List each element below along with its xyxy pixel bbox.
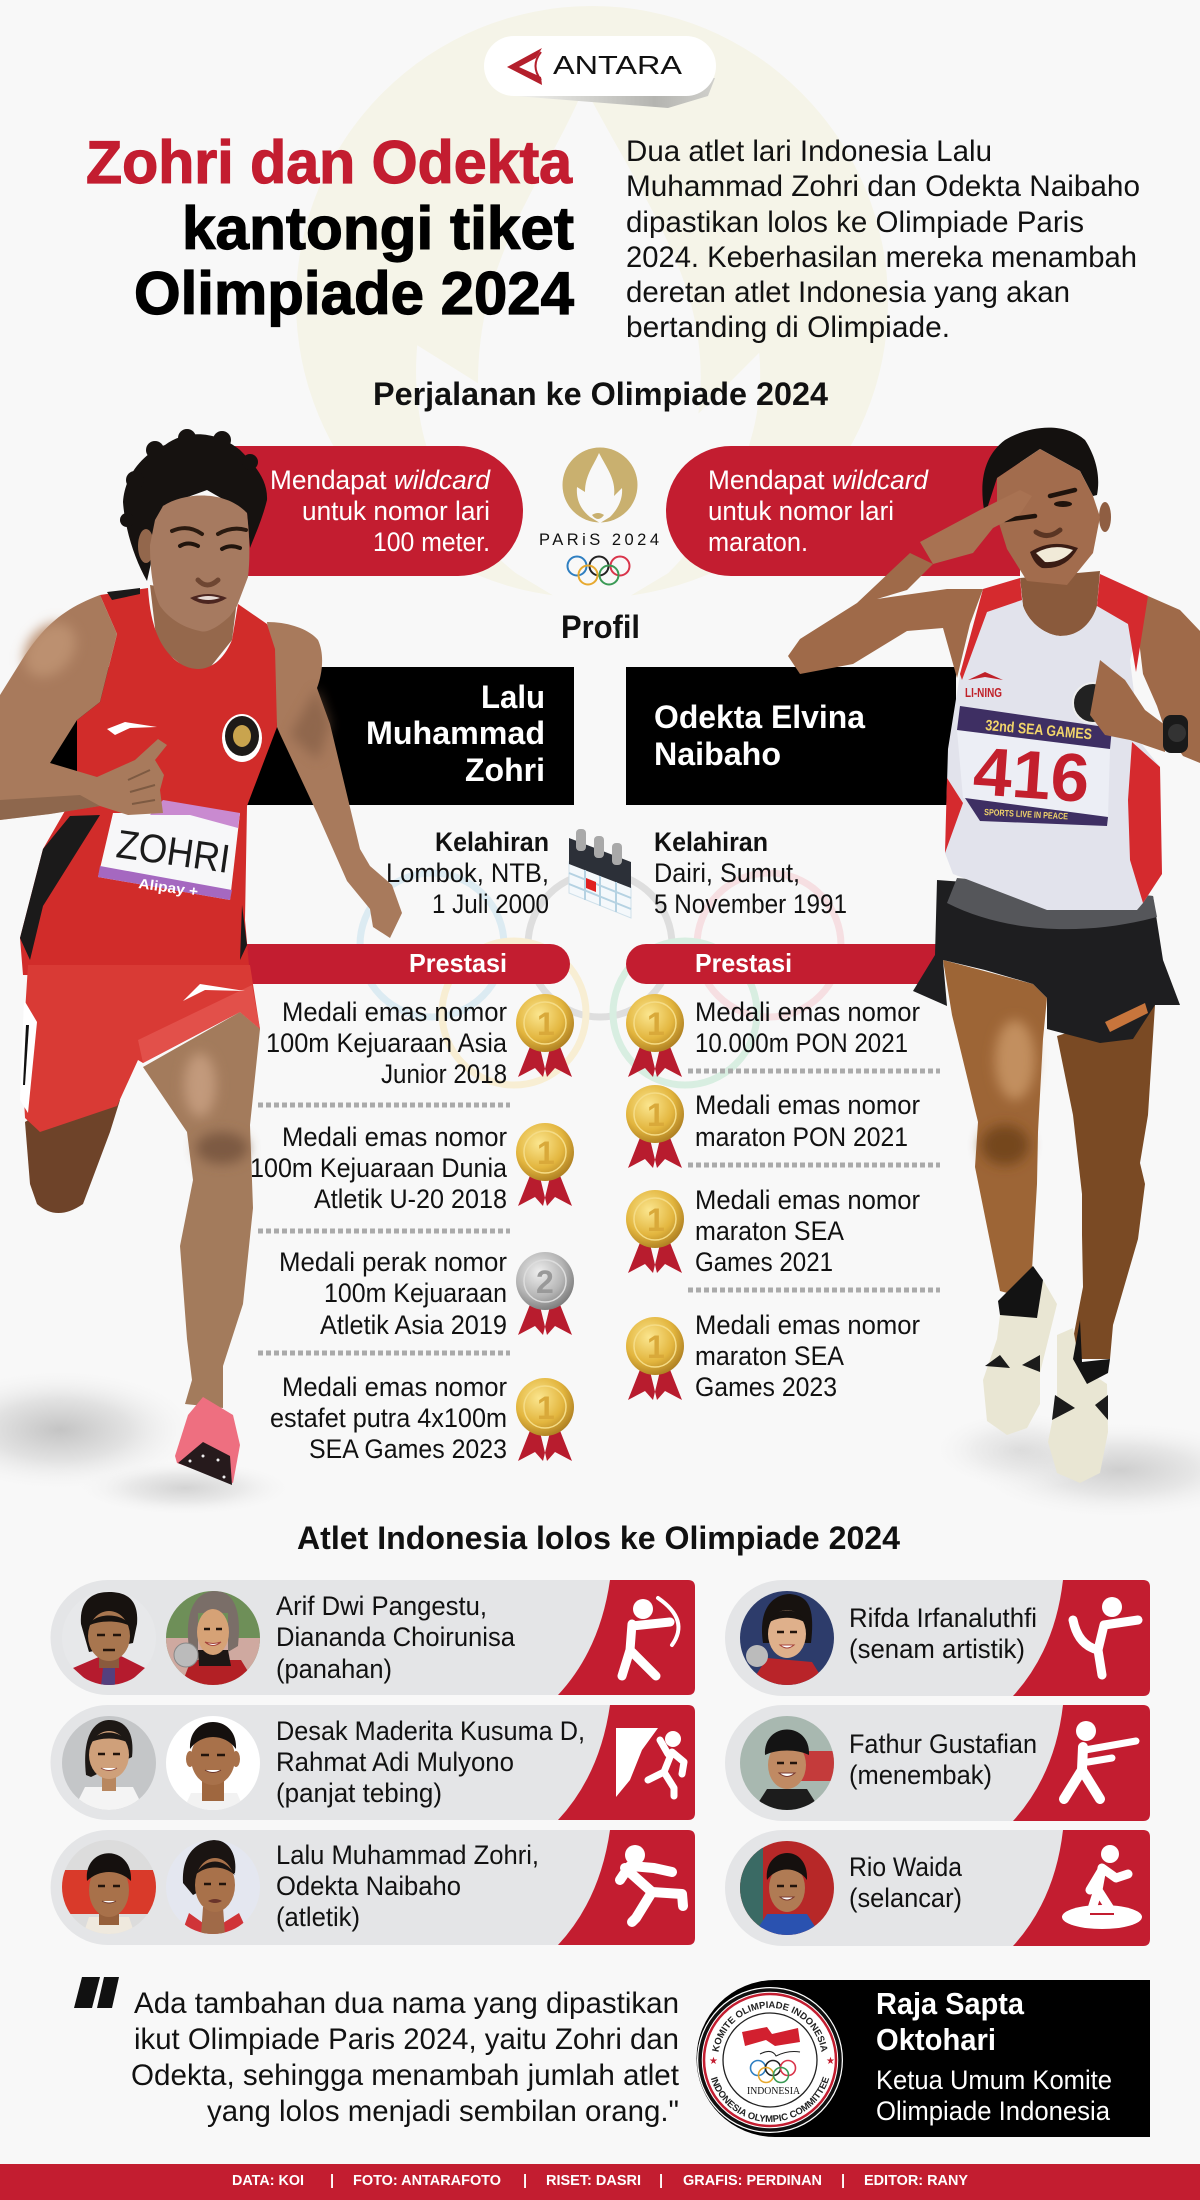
names: senam artistik (849, 1603, 1037, 1664)
panel: left wildcard pill: Mendapat wildcard (270, 465, 491, 495)
panel: left wildcard pill: untuk nomor lari (302, 496, 490, 526)
text: Zohri birth (386, 827, 549, 919)
heading: qualified athletes: Atlet Indonesia lolos ke Olimpiade 2024 (297, 1520, 900, 1556)
quote text: Ada tambahan dua nama yang dipastikan (134, 1987, 679, 2020)
achievement: SEA Games 2023 relay (270, 1372, 507, 1464)
saluting arm (788, 553, 983, 678)
names: senam artistik: (senam artistik) (849, 1634, 1025, 1664)
panel: Zohri name box (50, 667, 574, 805)
speaker role (876, 2065, 1112, 2126)
icon: gold medal 1 left (516, 994, 574, 1077)
photo: Rio (739, 1840, 835, 1936)
title: kantongi tiket (182, 195, 574, 262)
logo: Indonesian Olympic Committee (697, 1987, 843, 2133)
side panels (20, 588, 247, 960)
waistband (947, 878, 1157, 929)
logo: Indonesian Olympic Committee: KOMITE OLIMPIADE INDONESIA (712, 2001, 828, 2052)
names: panjat tebing: Rahmat Adi Mulyono (276, 1747, 514, 1777)
achievement: Asia 2019: 100m Kejuaraan (324, 1278, 507, 1308)
emblem (222, 714, 262, 762)
names: panjat tebing: Desak Maderita Kusuma D, (276, 1716, 585, 1746)
icon: gold medal 3 right (626, 1190, 684, 1273)
icon: gold medal 2 left (516, 1123, 574, 1206)
panel: right wildcard pill: Mendapat wildcard (708, 465, 929, 495)
figure: Zohri running (0, 429, 402, 1485)
panel: selancar (725, 1830, 1150, 1946)
logo: Indonesian Olympic Committee: INDONESIA OLYMPIC COMMITTEE (711, 2076, 830, 2122)
bib: 416 (971, 733, 1092, 817)
quote text (131, 1987, 679, 2128)
panel: panjat tebing (50, 1705, 695, 1820)
heading bar: Prestasi left (240, 944, 570, 984)
text: Odekta birth: Kelahiran (654, 827, 768, 857)
shorts (22, 965, 260, 1132)
achievement: PON 10000m (695, 997, 920, 1058)
bib: Alipay + (138, 875, 199, 899)
panel: atletik (51, 1830, 695, 1945)
achievement: Asia Junior 2018: 100m Kejuaraan Asia (266, 1028, 508, 1058)
achievement: Asia 2019 (279, 1247, 507, 1340)
icon: shooting (1064, 1721, 1136, 1799)
icon: gold medal 2 right: 1 (647, 1097, 665, 1133)
logo: Indonesian Olympic Committee: ★ (826, 2056, 835, 2067)
intro text (626, 135, 1140, 344)
background: faint flame watermark (296, 6, 888, 619)
quote text: yang lolos menjadi sembilan orang." (207, 2095, 679, 2128)
bib (957, 706, 1112, 826)
intro text: Muhammad Zohri dan Odekta Naibaho (626, 170, 1140, 203)
photo: Fathur (739, 1715, 835, 1811)
heading bar: Prestasi right: Prestasi (695, 948, 792, 978)
text: Zohri birth: 1 Juli 2000 (432, 889, 549, 919)
shoes (983, 1266, 1110, 1483)
text: Zohri birth: Kelahiran (435, 827, 549, 857)
achievement: SEA Games 2021: Games 2021 (695, 1247, 833, 1277)
text: Odekta birth (654, 827, 847, 919)
achievement: SEA Games 2021: Medali emas nomor (695, 1185, 920, 1215)
saluting hand (920, 490, 1032, 564)
logo: Indonesian Olympic Committee: ★ (709, 2056, 718, 2067)
panel: Odekta name box: Odekta Elvina (654, 699, 865, 735)
panel: Odekta achievements (626, 944, 940, 1402)
red corner (1013, 1580, 1150, 1696)
logo: Paris 2024: PARiS 2024 (539, 531, 659, 549)
red corner (558, 1580, 695, 1695)
names: menembak: Fathur Gustafian (849, 1729, 1037, 1759)
icon: gymnastics (1073, 1597, 1138, 1675)
icon: gold medal 1 right: 1 (647, 1006, 665, 1042)
right arm (267, 622, 402, 938)
icon: calendar (569, 829, 631, 918)
panel: Odekta name box (626, 667, 956, 805)
achievement: SEA Games 2023 (695, 1310, 920, 1402)
quote text: Odekta, sehingga menambah jumlah atlet (131, 2059, 679, 2092)
achievement: PON marathon (695, 1090, 920, 1152)
shorts (913, 880, 1180, 1043)
intro text: deretan atlet Indonesia yang akan (626, 276, 1070, 309)
names: panahan: (panahan) (276, 1654, 392, 1684)
photo: Rifda (739, 1590, 835, 1686)
shorts tag (1105, 1003, 1148, 1032)
left leg (943, 960, 1047, 1301)
title (86, 129, 575, 327)
pink shoe (175, 1397, 240, 1485)
neck (1020, 571, 1100, 636)
red corner (1013, 1830, 1150, 1946)
names: panahan: Diananda Choirunisa (276, 1622, 516, 1652)
names: atletik: Lalu Muhammad Zohri, (276, 1840, 539, 1870)
icon: running (620, 1845, 683, 1922)
text: Zohri birth: Lombok, NTB, (386, 858, 549, 888)
achievement: World U-20 2018: 100m Kejuaraan Dunia (250, 1153, 508, 1183)
achievement: SEA Games 2023 relay: Medali emas nomor (282, 1372, 507, 1402)
back leg (25, 1100, 120, 1213)
names: menembak: (menembak) (849, 1760, 992, 1790)
icon: surfing (1062, 1845, 1142, 1929)
text: Odekta birth: 5 November 1991 (654, 889, 847, 919)
photo: Desak (61, 1715, 157, 1811)
names: panahan (276, 1591, 516, 1684)
names: atletik: (atletik) (276, 1902, 360, 1932)
icon: climbing (616, 1728, 684, 1797)
bib: ZOHRI (114, 822, 233, 882)
neck (150, 585, 237, 680)
panel: right wildcard pill (666, 446, 1020, 576)
achievement: SEA Games 2021 (695, 1185, 920, 1277)
footer: credits (0, 2164, 1200, 2200)
ground shadow left (0, 1368, 295, 1516)
head (120, 429, 267, 632)
head (982, 428, 1111, 585)
footer: credits: | (330, 2173, 334, 2189)
logo on singlet: LI-NING (965, 685, 1002, 700)
panel: left wildcard pill: 100 meter. (373, 527, 490, 557)
achievement: PON 10000m: 10.000m PON 2021 (695, 1028, 908, 1058)
icon: gold medal 3 right: 1 (647, 1202, 665, 1238)
footer: credits: | (523, 2173, 527, 2189)
intro text: dipastikan lolos ke Olimpiade Paris (626, 206, 1084, 239)
intro text: 2024. Keberhasilan mereka menambah (626, 241, 1137, 274)
speaker role: Ketua Umum Komite (876, 2065, 1112, 2095)
footer: credits: FOTO: ANTARAFOTO (353, 2173, 501, 2189)
bib: 32nd SEA GAMES (985, 717, 1093, 743)
title: Zohri dan Odekta (86, 129, 573, 196)
footer: credits: RISET: DASRI (546, 2173, 641, 2189)
footer: credits: | (841, 2173, 845, 2189)
icon: archery (622, 1598, 678, 1676)
panel: Odekta name box: Naibaho (654, 736, 781, 772)
panel: Zohri achievements (240, 944, 570, 1464)
achievement: SEA Games 2023: Games 2023 (695, 1372, 837, 1402)
heading: journey: Perjalanan ke Olimpiade 2024 (373, 376, 828, 412)
achievement: PON 10000m: Medali emas nomor (695, 997, 920, 1027)
icon: gold medal 1 left: 1 (537, 1006, 555, 1042)
red corner (558, 1830, 695, 1945)
text: Odekta birth: Dairi, Sumut, (654, 858, 800, 888)
achievement: Asia 2019: Medali perak nomor (279, 1247, 507, 1277)
heading bar: Prestasi right (626, 944, 936, 984)
names: atletik (276, 1840, 539, 1932)
names: selancar: Rio Waida (849, 1852, 963, 1882)
footer: credits: GRAFIS: PERDINAN (683, 2173, 822, 2189)
front leg (143, 1012, 260, 1408)
footer: credits: DATA: KOI (232, 2173, 304, 2189)
icon: gold medal 1 right (626, 994, 684, 1077)
panel: right wildcard pill: untuk nomor lari (708, 496, 894, 526)
achievement: SEA Games 2023 relay: SEA Games 2023 (309, 1434, 507, 1464)
achievement: SEA Games 2023: maraton SEA (695, 1341, 844, 1371)
panel: right wildcard pill: maraton. (708, 527, 808, 557)
icon: gold medal 4 left: 1 (537, 1390, 555, 1426)
speaker name (876, 1986, 1025, 2057)
title: Olimpiade 2024 (134, 260, 575, 327)
achievement: SEA Games 2023 relay: estafet putra 4x100m (270, 1403, 507, 1433)
intro text: bertanding di Olimpiade. (626, 311, 950, 344)
speaker name: Raja Sapta (876, 1986, 1025, 2021)
panel: speaker (696, 1980, 1150, 2137)
background: faint olympic rings (360, 873, 841, 1085)
panel: left wildcard pill (230, 446, 523, 576)
achievement: SEA Games 2023: Medali emas nomor (695, 1310, 920, 1340)
left hand detail (128, 770, 155, 804)
bib: SPORTS LIVE IN PEACE (984, 807, 1068, 821)
achievement: PON marathon: Medali emas nomor (695, 1090, 920, 1120)
right hand (1090, 660, 1165, 752)
names: menembak (849, 1729, 1037, 1790)
names: panjat tebing: (panjat tebing) (276, 1778, 442, 1808)
quote text: ikut Olimpiade Paris 2024, yaitu Zohri dan (134, 2023, 679, 2056)
names: panjat tebing (276, 1716, 585, 1808)
photo: Diananda (165, 1590, 261, 1686)
speaker role: Olimpiade Indonesia (876, 2096, 1111, 2126)
icon: gold medal 4 right (626, 1317, 684, 1400)
logo: Paris 2024 (539, 448, 659, 584)
right arm (1137, 596, 1200, 763)
panel: Zohri name box: Lalu (481, 679, 545, 715)
icon: gold medal 4 left (516, 1378, 574, 1461)
names: panahan: Arif Dwi Pangestu, (276, 1591, 487, 1621)
achievement: Asia Junior 2018: Junior 2018 (381, 1059, 507, 1089)
right leg (1057, 1005, 1155, 1359)
ground shadow right (930, 1410, 1200, 1520)
icon: gold medal 2 left: 1 (537, 1135, 555, 1171)
figure: Odekta running (788, 428, 1200, 1483)
singlet (945, 574, 1162, 910)
footer: credits: | (659, 2173, 663, 2189)
panel: senam artistik (725, 1580, 1150, 1696)
names: selancar: (selancar) (849, 1883, 962, 1913)
panel: panahan (50, 1580, 695, 1695)
intro text: Dua atlet lari Indonesia Lalu (626, 135, 992, 168)
logo: Antara pill: ANTARA (553, 50, 683, 80)
heading bar: Prestasi left: Prestasi (409, 948, 507, 978)
speaker name: Oktohari (876, 2022, 996, 2057)
icon: gold medal 2 right (626, 1085, 684, 1168)
heading: profile: Profil (561, 609, 640, 645)
photo: Rahmat (165, 1715, 261, 1811)
singlet (20, 588, 277, 977)
icon: quotation mark (74, 1977, 119, 2008)
photo: Zohri (61, 1839, 157, 1935)
achievement: World U-20 2018: Atletik U-20 2018 (314, 1184, 507, 1214)
achievement: World U-20 2018 (250, 1122, 508, 1214)
logo: Antara pill (484, 36, 716, 108)
names: senam artistik: Rifda Irfanaluthfi (849, 1603, 1037, 1633)
names: selancar (849, 1852, 963, 1913)
achievement: Asia Junior 2018 (266, 997, 508, 1089)
logo on singlet (965, 672, 1003, 700)
swoosh logo (107, 722, 157, 735)
left arm and hand (0, 595, 167, 820)
bib (98, 800, 240, 900)
footer: credits: EDITOR: RANY (864, 2173, 968, 2189)
icon: gold medal 4 right: 1 (647, 1329, 665, 1365)
panel: Zohri name box: Muhammad (366, 715, 545, 751)
logo: Indonesian Olympic Committee: INDONESIA (747, 2086, 801, 2097)
achievement: PON marathon: maraton PON 2021 (695, 1122, 908, 1152)
panel: menembak (725, 1705, 1150, 1821)
achievement: World U-20 2018: Medali emas nomor (282, 1122, 507, 1152)
watch (1163, 715, 1188, 753)
red corner (558, 1705, 695, 1820)
icon: silver medal left: 2 (536, 1264, 554, 1300)
red corner (1013, 1705, 1150, 1821)
achievement: Asia 2019: Atletik Asia 2019 (320, 1310, 507, 1340)
photo: Odekta (165, 1839, 261, 1935)
achievement: SEA Games 2021: maraton SEA (695, 1216, 844, 1246)
panel: Zohri name box: Zohri (465, 752, 545, 788)
achievement: Asia Junior 2018: Medali emas nomor (282, 997, 507, 1027)
photo: Arif (73, 1592, 145, 1685)
names: atletik: Odekta Naibaho (276, 1871, 461, 1901)
singlet red trims (945, 574, 1162, 903)
icon: silver medal left (516, 1252, 574, 1335)
chest emblem (1073, 683, 1113, 723)
